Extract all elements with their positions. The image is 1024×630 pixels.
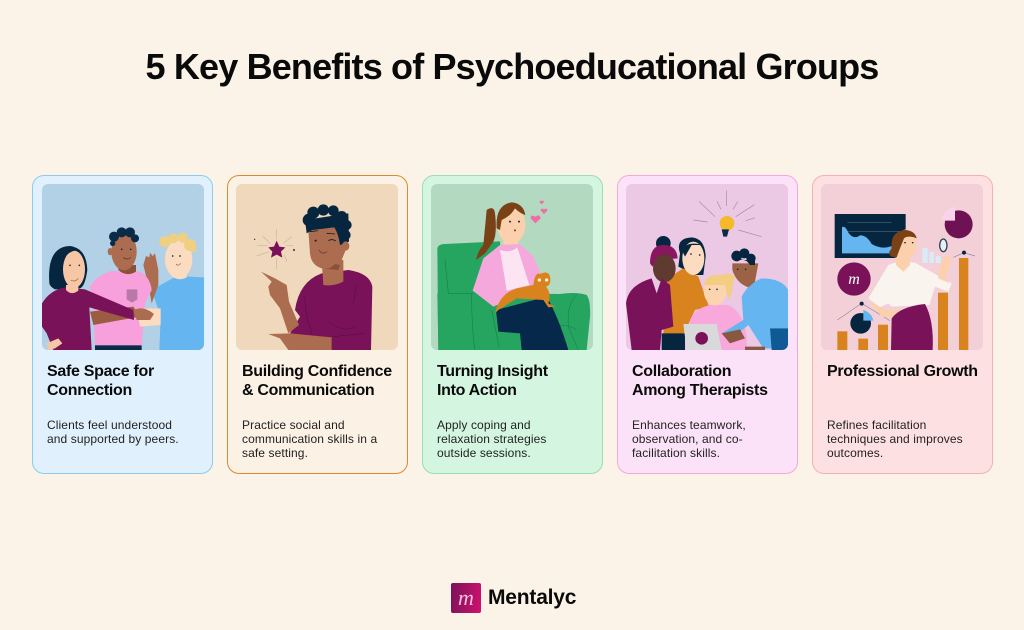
body text: Apply coping and <box>437 418 531 432</box>
heading <box>242 363 392 399</box>
illustration: woman presenting charts: m <box>848 271 860 288</box>
body text <box>437 418 546 460</box>
heading: Among Therapists <box>632 382 768 399</box>
body text: observation, and co- <box>632 432 743 446</box>
illustration: woman presenting charts <box>821 184 983 350</box>
illustration: four colleagues with laptop and lightbulb <box>626 184 788 350</box>
logo wordmark: Mentalyc <box>488 586 576 609</box>
body text: Enhances teamwork, <box>632 418 746 432</box>
body text: and supported by peers. <box>47 432 179 446</box>
logo icon: m <box>458 585 474 610</box>
title: 5 Key Benefits of Psychoeducational Groups <box>146 46 878 87</box>
heading: Connection <box>47 382 132 399</box>
body text: safe setting. <box>242 446 308 460</box>
body text: communication skills in a <box>242 432 377 446</box>
body text <box>827 418 963 460</box>
panel: building confidence <box>227 175 408 474</box>
panel: turning insight into action <box>422 175 603 474</box>
illustration: three friends <box>42 184 204 350</box>
heading <box>47 363 154 399</box>
illustration: man pointing at star <box>236 184 398 350</box>
body text: Clients feel understood <box>47 418 172 432</box>
heading: Professional Growth <box>827 363 978 380</box>
heading <box>632 363 768 399</box>
heading: Turning Insight <box>437 363 548 380</box>
illustration: woman with cat on green armchair <box>431 184 593 350</box>
heading: Building Confidence <box>242 363 392 380</box>
logo icon <box>451 583 481 613</box>
body text: facilitation skills. <box>632 446 720 460</box>
body text <box>242 418 378 460</box>
body text: techniques and improves <box>827 432 963 446</box>
heading <box>437 363 548 399</box>
heading: Safe Space for <box>47 363 154 380</box>
body text: outside sessions. <box>437 446 531 460</box>
panel: safe space for connection <box>32 175 213 474</box>
heading: Into Action <box>437 382 517 399</box>
heading: Collaboration <box>632 363 731 380</box>
body text: Refines facilitation <box>827 418 926 432</box>
body text <box>632 418 746 460</box>
body text: relaxation strategies <box>437 432 546 446</box>
panel: collaboration among therapists <box>617 175 798 474</box>
heading: & Communication <box>242 382 374 399</box>
body text: outcomes. <box>827 446 883 460</box>
body text <box>47 418 179 446</box>
body text: Practice social and <box>242 418 345 432</box>
panel: professional growth <box>812 175 993 474</box>
